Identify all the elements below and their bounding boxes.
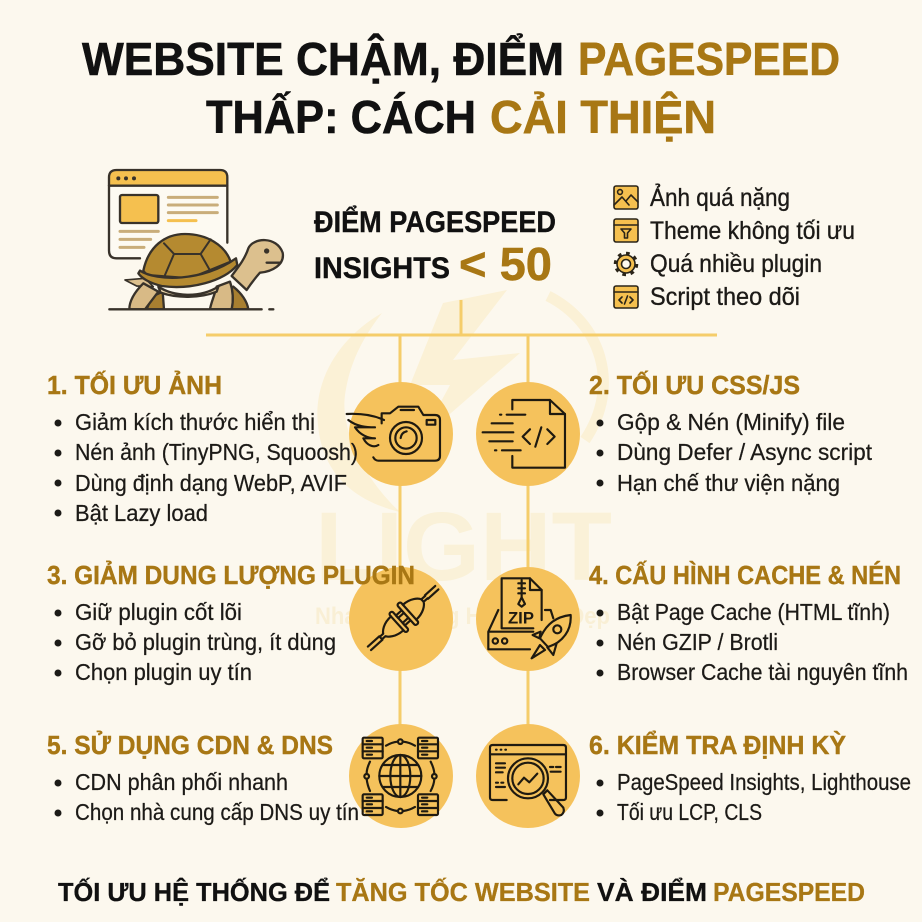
watermark logo: Nhanh Chóng Hiệu Quả Đẹp	[315, 603, 610, 630]
panel: 1 optimize images: Bật Lazy load	[75, 500, 208, 526]
watermark logo: LIGHT	[315, 492, 612, 601]
panel: 2 optimize css js: Dùng Defer / Async script	[617, 439, 873, 465]
panel: 4 cache and compression: Nén GZIP / Brotli	[617, 629, 778, 655]
step 3 circle and plug icon	[349, 567, 453, 671]
panel: 5 cdn and dns	[47, 729, 359, 825]
title	[82, 33, 840, 143]
footer message: PAGESPEED	[713, 877, 865, 907]
footer message: VÀ ĐIỂM	[597, 877, 707, 907]
step 5 circle and globe network icon	[349, 724, 453, 828]
footer message	[58, 877, 865, 907]
title: PAGESPEED	[578, 33, 840, 85]
panel: 5 cdn and dns: Chọn nhà cung cấp DNS uy tín	[75, 799, 359, 825]
step 1 circle and camera icon	[347, 382, 453, 486]
cause: plugins: Quá nhiều plugin	[650, 250, 822, 278]
causes list	[614, 182, 855, 311]
panel: 1 optimize images: 1. TỐI ƯU ẢNH	[47, 370, 222, 400]
panel: 4 cache and compression	[589, 560, 908, 685]
panel: 2 optimize css js: Hạn chế thư viện nặng	[617, 470, 840, 496]
panel: 6 periodic checks: 6. KIỂM TRA ĐỊNH KỲ	[589, 730, 846, 760]
cause: tracking scripts: Script theo dõi	[650, 283, 800, 311]
panel: 3 reduce plugins: Gỡ bỏ plugin trùng, ít dùng	[75, 629, 336, 655]
panel: 1 optimize images: Dùng định dạng WebP, AVIF	[75, 470, 347, 496]
footer message: TỐI ƯU HỆ THỐNG ĐỂ	[58, 877, 330, 907]
panel: 3 reduce plugins: 3. GIẢM DUNG LƯỢNG PLUGIN	[47, 560, 415, 590]
score callout: INSIGHTS	[314, 252, 450, 285]
icon: image	[614, 186, 638, 209]
score callout	[314, 205, 556, 290]
icon: theme filter	[614, 219, 638, 242]
panel: 5 cdn and dns: 5. SỬ DỤNG CDN & DNS	[47, 729, 333, 760]
step 2 circle and code file icon	[476, 382, 580, 486]
panel: 6 periodic checks: Tối ưu LCP, CLS	[617, 799, 762, 825]
score callout: < 50	[459, 238, 552, 290]
cause: heavy images: Ảnh quá nặng	[650, 182, 790, 212]
panel: 2 optimize css js: 2. TỐI ƯU CSS/JS	[589, 370, 800, 400]
panel: 1 optimize images: Giảm kích thước hiển thị	[75, 409, 315, 435]
panel: 1 optimize images: Nén ảnh (TinyPNG, Squoosh)	[75, 439, 358, 465]
step 6 circle and analytics magnifier icon	[476, 724, 580, 828]
cause: theme: Theme không tối ưu	[650, 217, 855, 245]
panel: 6 periodic checks	[589, 730, 911, 825]
browser window	[109, 170, 227, 258]
panel: 3 reduce plugins: Chọn plugin uy tín	[75, 659, 252, 685]
panel: 5 cdn and dns: CDN phân phối nhanh	[75, 769, 288, 795]
panel: 4 cache and compression: Bật Page Cache (HTML tĩnh)	[617, 599, 890, 625]
step 4 circle and zip rocket icon: ZIP	[508, 608, 534, 627]
step 4 circle and zip rocket icon	[476, 567, 580, 671]
title: CẢI THIỆN	[490, 91, 716, 143]
panel: 3 reduce plugins: Giữ plugin cốt lõi	[75, 599, 242, 625]
icon: script window	[614, 286, 638, 308]
panel: 2 optimize css js	[589, 370, 873, 496]
turtle	[109, 234, 283, 309]
footer message: TĂNG TỐC WEBSITE	[336, 877, 590, 907]
illustration: turtle and browser window	[109, 170, 283, 309]
title: THẤP: CÁCH	[206, 91, 476, 143]
title: WEBSITE CHẬM, ĐIỂM	[82, 33, 564, 85]
panel: 3 reduce plugins	[47, 560, 415, 685]
watermark logo	[315, 290, 612, 630]
panel: 2 optimize css js: Gộp & Nén (Minify) file	[617, 409, 845, 435]
connector lines	[206, 300, 717, 730]
score callout: ĐIỂM PAGESPEED	[314, 205, 556, 239]
icon: gear	[616, 254, 636, 274]
panel: 1 optimize images	[47, 370, 358, 526]
